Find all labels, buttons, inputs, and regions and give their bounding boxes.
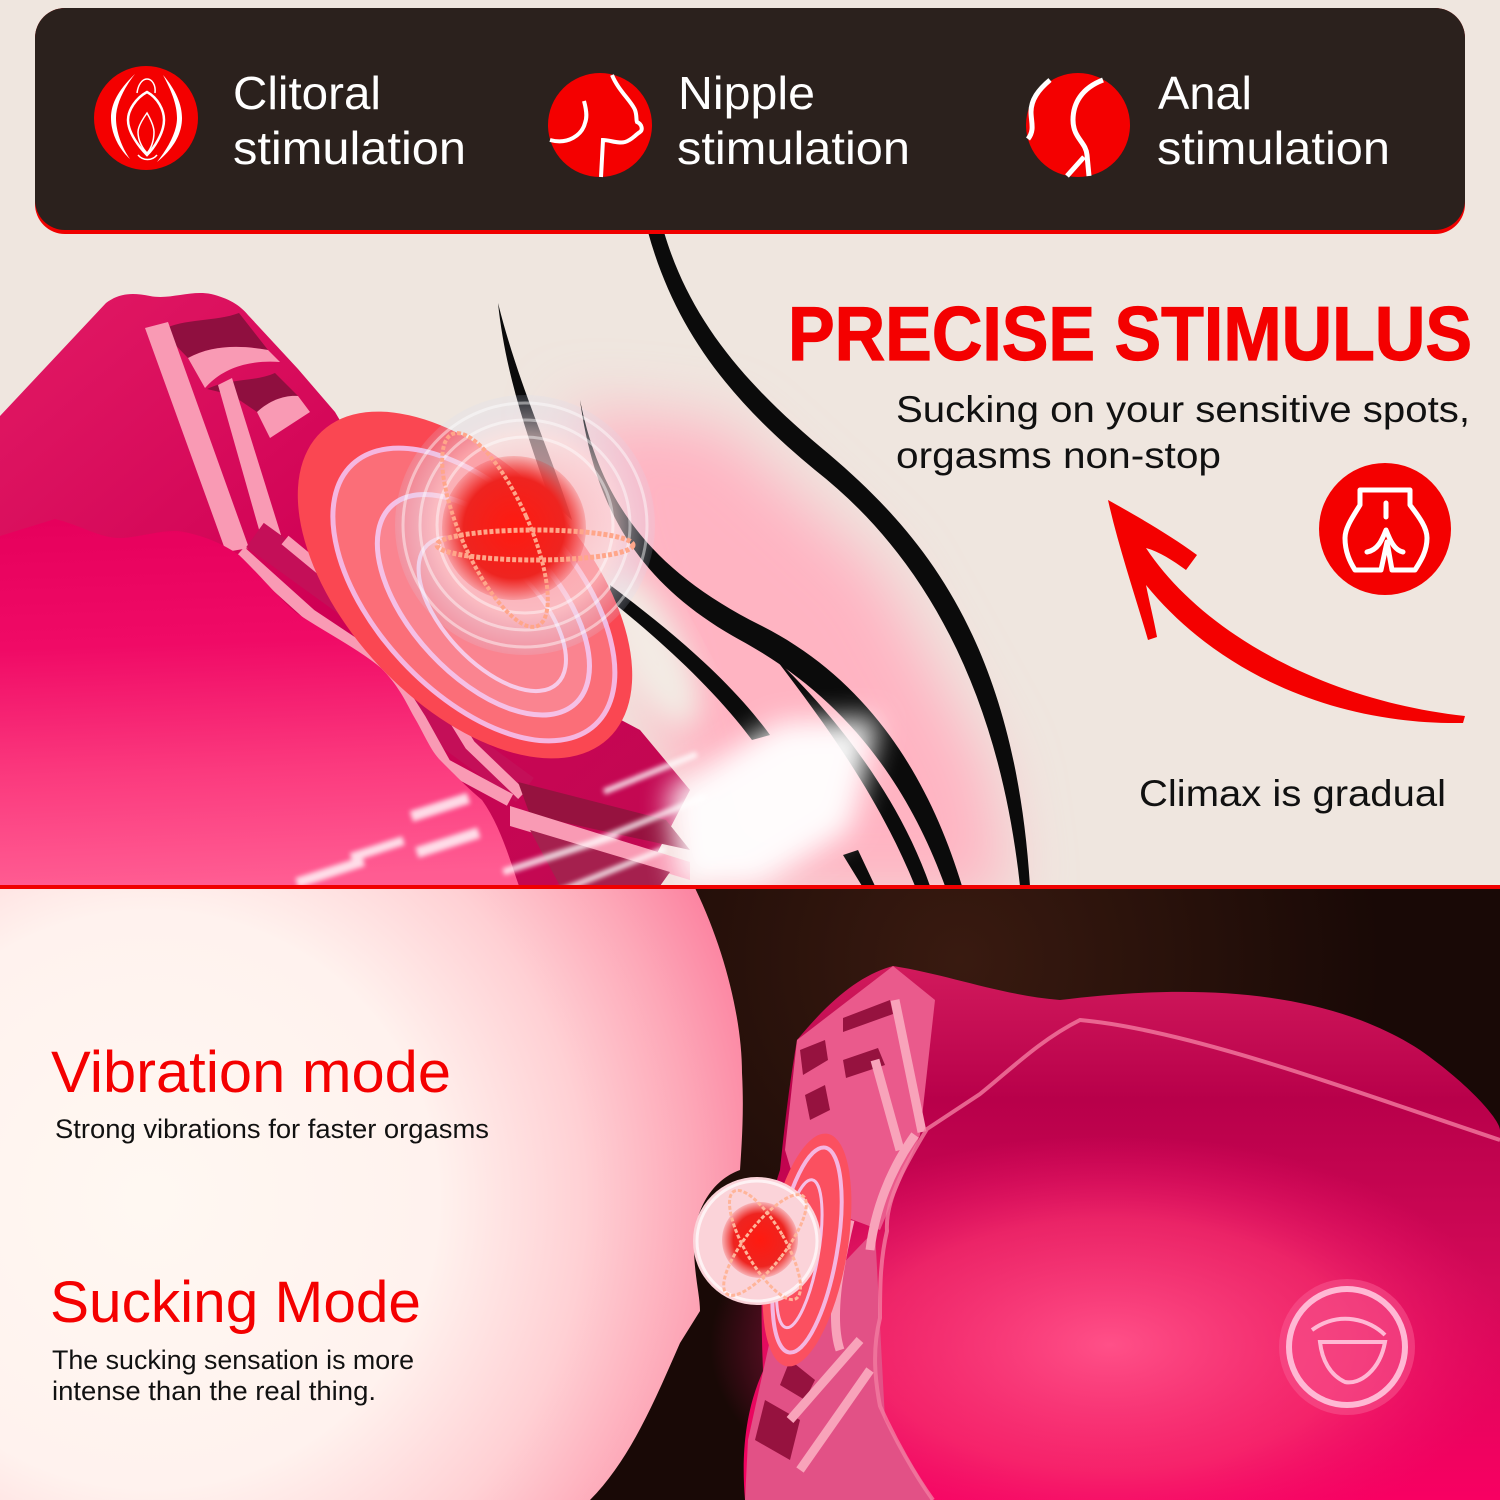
suction ring [298, 412, 632, 758]
product body [744, 966, 1500, 1500]
label: stimulation [1157, 122, 1390, 174]
suction rings [762, 1134, 852, 1366]
pink glow behind product [570, 410, 1010, 900]
panel: lower product [693, 966, 1500, 1500]
icon: body silhouette [1319, 463, 1451, 595]
text block: sucking mode [50, 1270, 421, 1406]
product body: upper petal [0, 293, 690, 886]
label: stimulation [677, 122, 910, 174]
feature: anal [1026, 67, 1390, 177]
pale gap beside ring [610, 571, 712, 734]
text block: vibration mode [51, 1040, 489, 1144]
panel: top features bar [35, 8, 1465, 234]
description text: orgasms non-stop [896, 435, 1221, 476]
label: Nipple [678, 67, 815, 119]
feature: clitoral [94, 66, 466, 174]
control button [1279, 1279, 1415, 1415]
label: Clitoral [233, 67, 381, 119]
text block: sucking mode: intense than the real thing. [52, 1376, 376, 1406]
caption: climax: Climax is gradual [1139, 773, 1446, 814]
icon: anal [1026, 73, 1130, 177]
ridge light strips [790, 1000, 922, 1470]
icon: nipple [548, 73, 652, 177]
arrow: red curve [1108, 500, 1465, 723]
description text: Sucking on your sensitive spots, [896, 389, 1470, 430]
divider line [0, 885, 1500, 889]
ridge band lower [745, 1230, 933, 1500]
product ridges [145, 313, 690, 886]
light streak fragments [293, 750, 699, 885]
feature: nipple [548, 67, 910, 177]
curved black silhouette lines [498, 232, 1030, 886]
ball [693, 1177, 821, 1309]
text block: sucking mode: The sucking sensation is more [52, 1345, 414, 1375]
icon: clitoral [94, 66, 198, 170]
ridge band upper [785, 966, 935, 1230]
glow and ball [395, 395, 655, 655]
front petal edge [875, 1020, 1500, 1500]
text block: vibration mode: Strong vibrations for faster orgasms [55, 1114, 489, 1144]
text block: vibration mode: Vibration mode [51, 1040, 451, 1105]
label: stimulation [233, 122, 466, 174]
panel: lower scene background [0, 888, 1500, 1500]
ridge dark windows [755, 1000, 893, 1460]
product glow [718, 1155, 1435, 1500]
white light streak [668, 718, 880, 886]
product body: lower petal [0, 519, 519, 886]
text block: sucking mode: Sucking Mode [50, 1270, 421, 1335]
label: Anal [1158, 67, 1252, 119]
panel: upper scene [0, 232, 1030, 900]
